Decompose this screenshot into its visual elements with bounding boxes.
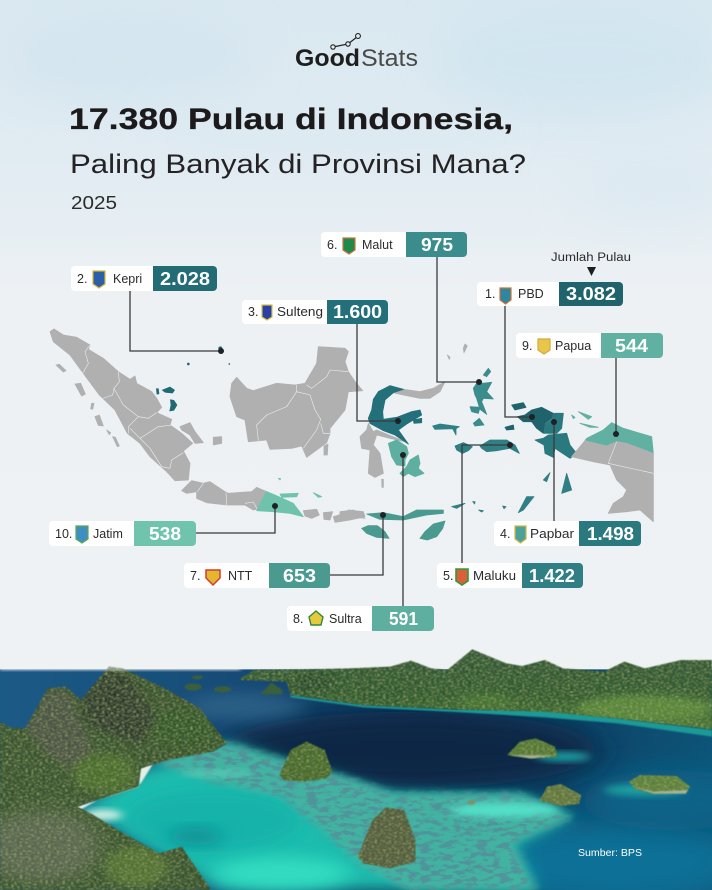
region: Sulawesi Tengah [368, 386, 422, 444]
label: 10 Jatim: 538 [149, 524, 181, 544]
label: 5 Maluku: 5. [443, 569, 453, 583]
label: 10 Jatim: 10. [55, 527, 72, 541]
right land mass [238, 649, 712, 729]
label: 5 Maluku: Maluku [473, 569, 516, 583]
label: 6 Malut: 975 [421, 235, 453, 255]
leader lines [130, 257, 619, 606]
label: 9 Papua: Papua [555, 339, 591, 353]
label: 4 Papbar: 1.498 [587, 524, 634, 544]
rock islands [279, 738, 690, 868]
label: 10 Jatim: Jatim [93, 527, 123, 541]
label: 7 NTT: NTT [228, 569, 253, 583]
label: 2 Kepri: 2. [77, 272, 87, 286]
label: 7 NTT: 7. [190, 569, 200, 583]
label: 8 Sultra: Sultra [329, 612, 362, 626]
logo: GoodStats: Good [295, 45, 360, 72]
map: western Indonesia [50, 329, 365, 522]
lagoon [77, 743, 572, 890]
year: 2025 [71, 193, 117, 213]
label: 10 Jatim [49, 521, 196, 546]
region: Papua Barat [535, 413, 577, 458]
map: eastern Indonesia [340, 344, 653, 540]
small far islets [184, 675, 282, 694]
label: 2 Kepri: 2.028 [160, 269, 210, 289]
region: Kalimantan [230, 347, 363, 457]
label: 6 Malut [321, 232, 467, 257]
region: Papua [572, 412, 653, 453]
far island shore [291, 695, 712, 737]
label: 6 Malut: Malut [362, 238, 393, 252]
label: 2 Kepri: Kepri [113, 272, 142, 286]
label: 9 Papua: 544 [615, 336, 648, 356]
label: 4 Papbar: 4. [500, 527, 510, 541]
label: 3 Sulteng: 3. [248, 305, 258, 319]
title: 17.380 Pulau di Indonesia, [69, 103, 513, 136]
photo: Raja Ampat islands [0, 649, 712, 890]
legend: Jumlah Pulau [551, 252, 631, 276]
region: Kepulauan Riau [156, 346, 230, 411]
region: Papua Barat Daya [505, 403, 553, 433]
island rocky bases [467, 755, 688, 805]
region: Java [182, 481, 267, 510]
label: 8 Sultra: 8. [293, 612, 303, 626]
label: 8 Sultra [287, 606, 434, 631]
region: Jawa Timur [257, 478, 322, 517]
label: 3 Sulteng: Sulteng [277, 305, 323, 319]
label: 5 Maluku: 1.422 [529, 566, 575, 586]
region: Maluku [452, 440, 572, 513]
region: North and South Sulawesi [360, 344, 467, 487]
region: Papua interior provinces [572, 441, 653, 522]
source credit: Sumber: BPS [578, 847, 642, 859]
region: Sumatra [50, 329, 222, 481]
photo top haze [0, 666, 240, 671]
label: 1 PBD [477, 282, 623, 306]
region: Nusa Tenggara Timur [362, 510, 445, 540]
region: Sulawesi Tenggara [388, 440, 424, 477]
label: 9 Papua [516, 333, 663, 358]
label: 3 Sulteng [242, 300, 388, 324]
bright reef shallows [77, 752, 686, 820]
label: 7 NTT: 653 [283, 566, 316, 586]
label: 4 Papbar [494, 521, 641, 546]
region: Bali and Nusa Tenggara Barat [303, 509, 365, 522]
logo: GoodStats: Stats [361, 45, 418, 72]
label: 1 PBD: 1. [485, 287, 495, 301]
region: Banggai islands [433, 424, 459, 435]
sea [0, 669, 712, 890]
label: 2 Kepri [71, 266, 217, 291]
subtitle: Paling Banyak di Provinsi Mana? [70, 149, 526, 179]
label: 1 PBD: PBD [518, 287, 544, 301]
logo: GoodStats [295, 34, 418, 72]
label: 3 Sulteng: 1.600 [333, 302, 382, 322]
label: 5 Maluku [437, 563, 583, 588]
label: 6 Malut: 6. [327, 238, 337, 252]
label: 9 Papua: 9. [522, 339, 532, 353]
region: Sumbawa [340, 510, 365, 522]
label: 8 Sultra: 591 [389, 609, 418, 629]
label: 7 NTT [184, 563, 330, 588]
left land mass [0, 667, 227, 890]
legend: Jumlah Pulau: Jumlah Pulau [551, 252, 631, 264]
label: 4 Papbar: Papbar [530, 527, 574, 541]
coral reef [154, 743, 572, 890]
region: Maluku Utara [470, 368, 493, 426]
label: 1 PBD: 3.082 [566, 284, 616, 304]
